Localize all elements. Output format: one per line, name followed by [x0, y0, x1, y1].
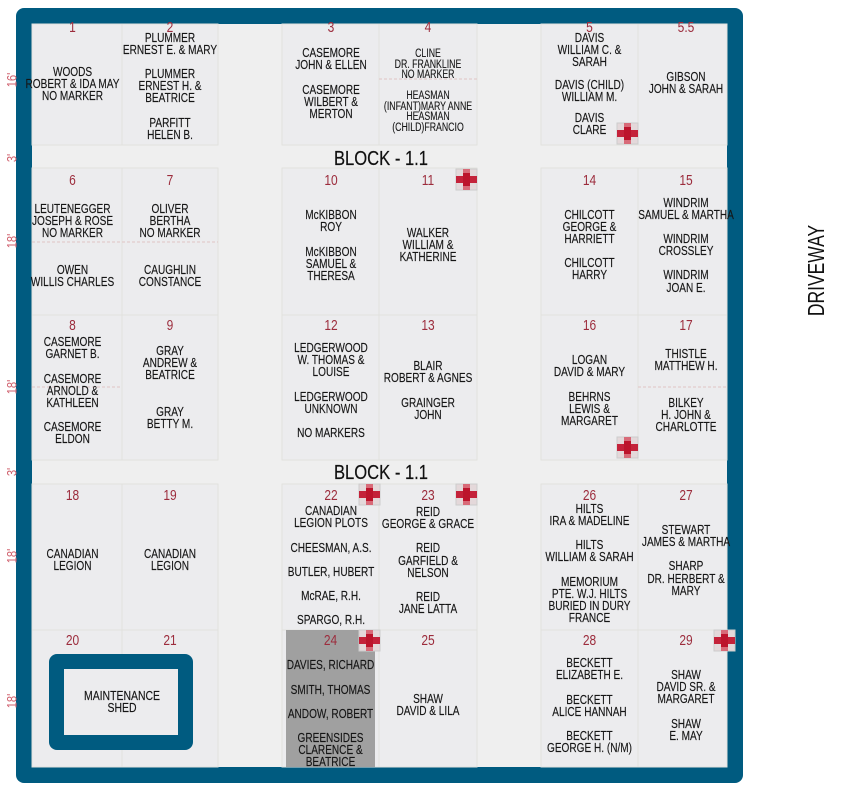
plot 14: HARRY: [572, 269, 607, 282]
maintenance shed: MAINTENANCE: [84, 690, 160, 703]
plot 16: [541, 315, 638, 460]
plot 9: ANDREW &: [143, 357, 197, 370]
plot 3: JOHN & ELLEN: [295, 59, 367, 72]
icon: red cross plot 24: [359, 630, 380, 651]
plot 8: ARNOLD &: [47, 385, 99, 398]
plot 29: DAVID SR. &: [656, 681, 716, 694]
plot 24: CLARENCE &: [298, 744, 363, 757]
plot 4: [379, 19, 477, 145]
plot 5: WILLIAM C. &: [558, 44, 622, 57]
icon: red cross plot 22: [359, 484, 380, 505]
plot 10: SAMUEL &: [306, 258, 357, 271]
plot 23: 23: [421, 487, 435, 503]
plot 3: [282, 19, 379, 145]
plot 8: ELDON: [55, 433, 90, 446]
plot 13: [379, 315, 477, 460]
plot 17: [638, 315, 727, 460]
plot 13: 13: [421, 317, 435, 333]
dimension 18 feet: 18': [4, 380, 20, 394]
dimension 18 feet: 18': [4, 234, 20, 248]
plot 8: [32, 315, 122, 460]
plot 29: 29: [679, 632, 693, 648]
plot 11: KATHERINE: [400, 251, 457, 264]
plot 18: 18: [66, 487, 79, 503]
plot 19: CANADIAN: [144, 548, 196, 561]
plot 26: HILTS: [576, 503, 604, 516]
plot 14: 14: [583, 172, 597, 188]
plot 5: [541, 19, 638, 145]
plot 24: BEATRICE: [306, 756, 356, 769]
plot 12: NO MARKERS: [297, 427, 365, 440]
plot 19: [122, 484, 218, 630]
plot 11: WALKER: [407, 227, 449, 240]
plot 17: H. JOHN &: [661, 409, 711, 422]
plot 18: CANADIAN: [46, 548, 99, 561]
plot 28: BECKETT: [566, 730, 613, 743]
plot 28: ALICE HANNAH: [552, 706, 627, 719]
plot 10: McKIBBON: [305, 246, 357, 259]
plot 2: PLUMMER: [145, 32, 195, 45]
plot 1: WOODS: [53, 66, 92, 79]
plot 9: BETTY M.: [147, 418, 193, 431]
plot 24: SMITH, THOMAS: [291, 684, 371, 697]
plot 16: DAVID & MARY: [554, 366, 625, 379]
plot 2: HELEN B.: [147, 129, 193, 142]
plot 9: 9: [167, 317, 173, 333]
plot 24: [282, 630, 379, 769]
plot 14: CHILCOTT: [564, 257, 615, 270]
plot 25: [379, 630, 477, 767]
plot 29: E. MAY: [669, 730, 703, 743]
plot 2: 2: [167, 19, 173, 35]
plot 15 names: WINDRIM: [663, 197, 709, 210]
plot 13: BLAIR: [413, 360, 443, 373]
plot 6: 6: [69, 172, 76, 188]
plot 8: GARNET B.: [45, 348, 100, 361]
plot 20: 20: [66, 632, 80, 648]
icon: red cross plot 23: [456, 484, 477, 505]
plot 4: HEASMAN: [406, 89, 450, 102]
plot 15 names: SAMUEL & MARTHA: [638, 209, 734, 222]
plot 13: JOHN: [414, 409, 442, 422]
plot 3: 3: [328, 19, 334, 35]
plot 27: SHARP: [669, 560, 703, 573]
plot 1: ROBERT & IDA MAY: [26, 78, 120, 91]
plot 26: 26: [583, 487, 596, 503]
plot 5: CLARE: [573, 124, 607, 137]
plot 25: SHAW: [413, 693, 443, 706]
plot 10: [282, 168, 379, 315]
plot 11: WILLIAM &: [403, 239, 454, 252]
plot 28: BECKETT: [566, 657, 613, 670]
plot 5.5: 5.5: [678, 19, 694, 35]
plot 27: [638, 484, 730, 630]
plot 19: 19: [163, 487, 177, 503]
plot 6: JOSEPH & ROSE: [32, 215, 113, 228]
plot 28: GEORGE H. (N/M): [547, 742, 632, 755]
plot 6: OWEN: [57, 264, 88, 277]
plot 23: GEORGE & GRACE: [382, 518, 474, 531]
plot 8: CASEMORE: [44, 336, 102, 349]
plot 27: MARY: [672, 585, 701, 598]
plot 8: CASEMORE: [44, 373, 102, 386]
plot 4: NO MARKER: [401, 68, 455, 81]
plot 9: BEATRICE: [145, 369, 195, 382]
plot 9: GRAY: [156, 345, 184, 358]
plot 4: CLINE: [415, 47, 441, 60]
plot 7: CONSTANCE: [139, 276, 202, 289]
plot 4: (INFANT)MARY ANNE: [384, 100, 472, 113]
dimension 18 feet: 18': [4, 549, 20, 563]
dimension 18 feet: 18': [4, 694, 20, 708]
plot 22: CANADIAN: [305, 505, 357, 518]
plot 16: MARGARET: [561, 415, 618, 428]
plot 1: 1: [69, 19, 76, 35]
plot 28: ELIZABETH E.: [556, 669, 623, 682]
plot 26: PTE. W.J. HILTS: [552, 588, 628, 601]
plot 23: REID: [416, 506, 440, 519]
plot 27: JAMES & MARTHA: [642, 536, 730, 549]
icon: red cross plot 11: [456, 169, 477, 190]
plot 5: 5: [586, 19, 593, 35]
plot 15: 15: [679, 172, 693, 188]
plot 29: SHAW: [671, 669, 701, 682]
plot 12: 12: [324, 317, 338, 333]
plot 2: BEATRICE: [145, 92, 195, 105]
plot 26: [541, 484, 638, 630]
dimension 3 feet: 3': [4, 154, 20, 162]
plot 4: (CHILD)FRANCIO: [392, 121, 464, 134]
block heading top: BLOCK - 1.1: [334, 147, 428, 169]
plot 2: [122, 19, 218, 145]
plot 26: BURIED IN DURY: [548, 600, 631, 613]
plot 2: PARFITT: [149, 117, 191, 130]
plot 27: 27: [679, 487, 693, 503]
cemetery grounds: [32, 24, 727, 767]
plot 12: [282, 315, 379, 460]
plot 19: LEGION: [151, 560, 189, 573]
plot 15 names: JOAN E.: [666, 282, 706, 295]
driveway label: DRIVEWAY: [805, 225, 830, 316]
plot 28: BECKETT: [566, 694, 613, 707]
plot 25: DAVID & LILA: [396, 705, 460, 718]
plot 23: REID: [416, 591, 440, 604]
maintenance shed: [49, 654, 193, 750]
plot 16: BEHRNS: [569, 391, 611, 404]
plot 2: PLUMMER: [145, 68, 195, 81]
plot 24: 24: [324, 632, 338, 648]
plot 12: W. THOMAS &: [298, 354, 365, 367]
plot 22: SPARGO, R.H.: [297, 614, 365, 627]
plot 17: CHARLOTTE: [656, 421, 717, 434]
plot 1: [26, 19, 122, 145]
plot 28: [541, 630, 638, 767]
plot 23: JANE LATTA: [399, 603, 458, 616]
plot 1: NO MARKER: [42, 90, 103, 103]
dimension 16 feet: 16': [4, 73, 20, 87]
plot 28: 28: [583, 632, 596, 648]
plot 3: CASEMORE: [302, 47, 360, 60]
plot 10: THERESA: [307, 270, 355, 283]
plot 21: [122, 630, 218, 767]
plot 7: [122, 168, 218, 315]
plot 9: GRAY: [156, 406, 184, 419]
plot 27: DR. HERBERT &: [647, 573, 725, 586]
plot 2: ERNEST H. &: [138, 80, 202, 93]
plot 14: HARRIETT: [564, 233, 615, 246]
block heading lower: BLOCK - 1.1: [334, 461, 428, 483]
plot 15: [638, 168, 727, 315]
plot 22: BUTLER, HUBERT: [288, 566, 374, 579]
plot 17: 17: [679, 317, 693, 333]
plot 15 names: CROSSLEY: [659, 245, 714, 258]
icon: red cross plot 29: [714, 630, 735, 651]
plot 4: HEASMAN: [406, 110, 450, 123]
plot 5.5: GIBSON: [666, 71, 706, 84]
plot 29: [638, 630, 727, 767]
plot 11: [379, 168, 477, 315]
plot 14: GEORGE &: [563, 221, 617, 234]
plot 12: LOUISE: [313, 366, 350, 379]
plot 10: ROY: [320, 221, 342, 234]
plot 26: IRA & MADELINE: [550, 515, 630, 528]
plot 15 names: WINDRIM: [663, 269, 709, 282]
plot 10: 10: [324, 172, 338, 188]
plot 18: LEGION: [53, 560, 92, 573]
icon: red cross plot 5: [617, 123, 638, 144]
plot 7: 7: [167, 172, 173, 188]
plot 18: [32, 484, 122, 630]
plot 6: NO MARKER: [42, 227, 103, 240]
plot 25: 25: [421, 632, 435, 648]
plot 29: SHAW: [671, 718, 701, 731]
plot 5.5: [638, 19, 727, 145]
plot 13: ROBERT & AGNES: [384, 372, 473, 385]
plot 8: CASEMORE: [44, 421, 102, 434]
plot 7: CAUGHLIN: [144, 264, 196, 277]
plot 17: BILKEY: [668, 397, 704, 410]
plot 16: 16: [583, 317, 596, 333]
plot 14: CHILCOTT: [564, 209, 615, 222]
plot 22: CHEESMAN, A.S.: [290, 542, 372, 555]
icon: red cross plot 16: [617, 437, 638, 458]
plot 7: BERTHA: [150, 215, 191, 228]
plot 5.5: JOHN & SARAH: [649, 83, 723, 96]
maintenance shed: SHED: [107, 702, 137, 715]
plot 22: McRAE, R.H.: [301, 590, 361, 603]
plot 5: WILLIAM M.: [562, 91, 617, 104]
plot 17: THISTLE: [665, 348, 707, 361]
plot 27: STEWART: [662, 524, 710, 537]
plot 10: McKIBBON: [305, 209, 357, 222]
plot 22: 22: [324, 487, 338, 503]
plot 21: 21: [163, 632, 177, 648]
plot 4: DR. FRANKLINE: [395, 58, 461, 71]
plot 2: ERNEST E. & MARY: [123, 44, 217, 57]
plot 8: 8: [69, 317, 76, 333]
plot 3: WILBERT &: [304, 96, 358, 109]
plot 26: HILTS: [576, 539, 604, 552]
plot 6: WILLIS CHARLES: [31, 276, 115, 289]
plot 20: [32, 630, 122, 767]
plot 15 names: WINDRIM: [663, 233, 709, 246]
plot 24: GREENSIDES: [298, 732, 364, 745]
plot 23: NELSON: [407, 567, 449, 580]
plot 29: MARGARET: [657, 693, 715, 706]
plot 5: DAVIS (CHILD): [555, 79, 624, 92]
plot 17: MATTHEW H.: [655, 360, 717, 373]
plot 14: [541, 168, 638, 315]
plot 11: 11: [422, 172, 434, 188]
plot 16: LOGAN: [572, 354, 607, 367]
plot 6: LEUTENEGGER: [34, 203, 111, 216]
plot 5: DAVIS: [575, 112, 605, 125]
plot 24: DAVIES, RICHARD: [287, 659, 374, 672]
plot 24: ANDOW, ROBERT: [288, 708, 373, 721]
plot 26: WILLIAM & SARAH: [545, 551, 634, 564]
plot 13: GRAINGER: [401, 397, 455, 410]
plot 23: REID: [416, 542, 440, 555]
plot 9: [122, 315, 218, 460]
plot 22: [282, 484, 379, 630]
plot 5: SARAH: [572, 56, 607, 69]
plot 12: LEDGERWOOD: [294, 391, 368, 404]
plot 6: [31, 168, 122, 315]
dimension 3 feet: 3': [4, 468, 20, 476]
plot 5: DAVIS: [575, 32, 605, 45]
plot 23: [379, 484, 477, 630]
plot 16: LEWIS &: [569, 403, 610, 416]
plot 26: FRANCE: [569, 612, 611, 625]
plot 4: 4: [425, 19, 432, 35]
plot 3: CASEMORE: [302, 84, 360, 97]
plot 7: NO MARKER: [140, 227, 200, 240]
plot 12: LEDGERWOOD: [294, 342, 368, 355]
plot 23: GARFIELD &: [398, 555, 458, 568]
plot 22: LEGION PLOTS: [294, 517, 368, 530]
plot 8: KATHLEEN: [46, 397, 99, 410]
plot 26: MEMORIUM: [561, 576, 618, 589]
plot 12: UNKNOWN: [304, 403, 358, 416]
plot 7: OLIVER: [152, 203, 188, 216]
plot 3: MERTON: [309, 108, 353, 121]
